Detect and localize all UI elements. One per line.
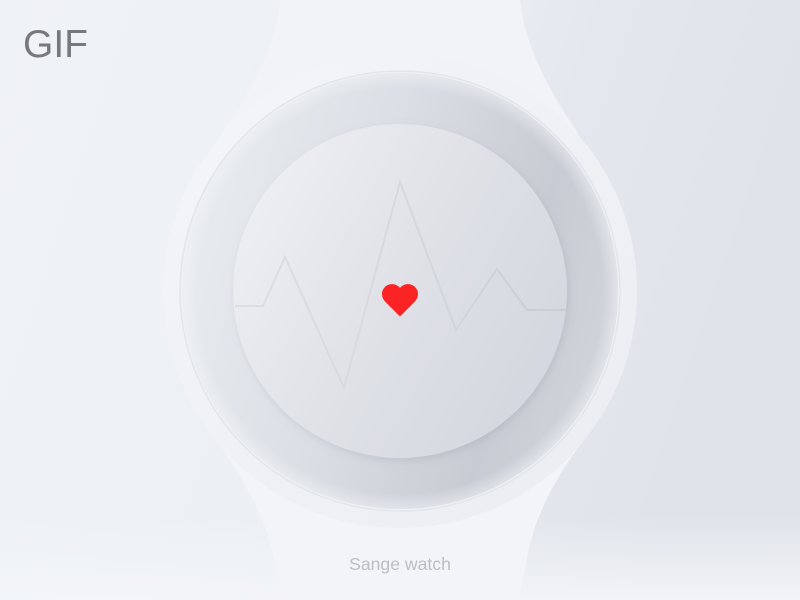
watch case — [163, 54, 637, 528]
caption: Sange watch: Sange watch — [349, 554, 451, 574]
icon: heart — [382, 284, 418, 316]
watch strap — [217, 0, 586, 600]
heart rate line — [235, 182, 566, 388]
floor glow — [0, 515, 800, 600]
watch face — [233, 124, 567, 458]
bezel ring — [182, 73, 618, 509]
case inner rim — [180, 71, 620, 511]
title: GIF: GIF — [23, 23, 88, 66]
